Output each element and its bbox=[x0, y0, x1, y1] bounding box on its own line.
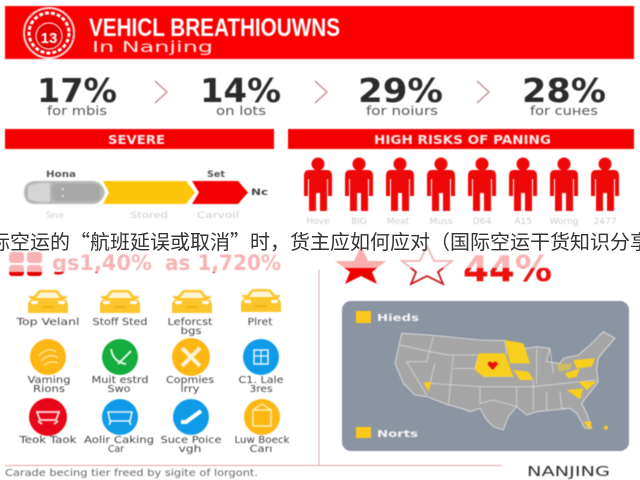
severity bar: yellow bbox=[103, 181, 195, 204]
footer note: Carade becing tier freed by sigite of lorgont. bbox=[5, 468, 258, 479]
icon: round badge with 13 bbox=[24, 8, 74, 58]
people labels: BIG bbox=[351, 217, 367, 227]
arrow 1 bbox=[155, 81, 167, 103]
row 3 labels: Aolir Caking bbox=[84, 435, 154, 446]
row 3 labels: Teok Taok bbox=[18, 435, 77, 446]
row 2 labels: Muit estrd bbox=[92, 375, 148, 386]
brand: Nanjing: NANJING bbox=[527, 465, 610, 480]
stat 29%: for noiurs bbox=[366, 103, 438, 118]
icon: yellow leaf circle bbox=[30, 339, 66, 375]
subtitle: In Nanjing bbox=[92, 38, 213, 56]
stat text: 44%: 44% bbox=[463, 249, 552, 290]
row 2 labels: Swo bbox=[108, 384, 131, 395]
legend: Norts: Norts bbox=[377, 429, 418, 440]
row: circles 1 bbox=[30, 338, 279, 376]
icon: car 3 bbox=[172, 290, 212, 313]
row 1 labels: Top Velanl bbox=[15, 317, 80, 328]
people labels: D64 bbox=[473, 217, 491, 227]
row: cars bbox=[28, 289, 281, 313]
people labels: Meat bbox=[387, 217, 410, 227]
heading: high risks: HIGH RISKS OF PANING bbox=[374, 133, 551, 147]
heading: severe bbox=[5, 129, 274, 149]
frame lines bbox=[319, 270, 502, 466]
row 3 labels: vgh bbox=[178, 444, 202, 455]
icon: grey car segment bbox=[24, 181, 105, 204]
stat 28%: for cuнes bbox=[530, 103, 598, 118]
stat 17%: for mbis bbox=[47, 103, 107, 118]
icon: car 1 bbox=[28, 290, 68, 313]
people labels: Worng bbox=[550, 217, 578, 227]
severity bar: red bbox=[192, 181, 248, 204]
legend: Norts bbox=[356, 427, 418, 440]
title: VEHICL BREATHIOUWNS bbox=[89, 14, 340, 42]
panel: map bbox=[342, 301, 629, 451]
wash over strip: left bbox=[0, 232, 319, 272]
icon: blue box circle bbox=[243, 339, 279, 375]
row 3 labels: Car bbox=[108, 444, 124, 455]
row 3 labels: Carı bbox=[250, 444, 272, 455]
row 1 labels: Plret bbox=[248, 317, 273, 328]
icon: yellow cross circle bbox=[172, 338, 210, 376]
icon: blue check circle bbox=[173, 399, 209, 435]
icon: grid of squares bbox=[9, 252, 42, 276]
people labels: Hove bbox=[306, 217, 330, 227]
stat 17%: 17% bbox=[37, 71, 117, 110]
icon: car 2 bbox=[100, 290, 140, 313]
people labels: Muss bbox=[430, 217, 453, 227]
icon: green phone circle bbox=[102, 339, 138, 375]
label: Hona: Hona bbox=[46, 170, 76, 180]
icon: round badge with 13: 13 bbox=[41, 30, 57, 47]
icon: red car circle bbox=[29, 398, 67, 436]
stats strip under panels bbox=[9, 246, 552, 290]
stat text: as 1,720%: as 1,720% bbox=[165, 251, 281, 275]
stat 14%: on lots bbox=[216, 103, 266, 118]
panel: high risks bbox=[288, 129, 634, 227]
panel: severe bbox=[5, 129, 274, 221]
people labels: A15 bbox=[514, 217, 532, 227]
highlighted states bbox=[423, 340, 608, 430]
icon: red heart marker bbox=[488, 362, 498, 370]
stat text: gs 1,40%: gs1,40% bbox=[52, 251, 152, 275]
row 2 labels: C1. Lale bbox=[238, 375, 284, 386]
icon: car 4 bbox=[241, 289, 281, 312]
legend: Hieds: Hieds bbox=[377, 313, 419, 324]
people pictogram row bbox=[304, 158, 619, 211]
arrow 3 bbox=[477, 81, 489, 103]
stat 14%: 14% bbox=[200, 71, 281, 110]
label: Seve: Seve bbox=[46, 211, 64, 221]
icon: yellow box circle bbox=[244, 399, 280, 435]
row 1 labels: bgs bbox=[180, 326, 202, 337]
row 2 labels: lrry bbox=[180, 384, 200, 395]
row 2 labels bbox=[28, 375, 284, 395]
row 1 labels: Leforcst bbox=[168, 317, 213, 328]
legend: Hieds bbox=[356, 311, 419, 324]
people labels bbox=[306, 217, 616, 227]
stat 29%: 29% bbox=[358, 71, 443, 110]
arrow 2 bbox=[315, 81, 327, 103]
row 1 labels: Stoff Sted bbox=[92, 317, 148, 328]
icon: blue car circle bbox=[102, 399, 138, 435]
header banner bbox=[5, 6, 634, 59]
row 2 labels: Vaming bbox=[28, 375, 70, 386]
row 2 labels: Copmies bbox=[166, 375, 214, 386]
stat row bbox=[37, 71, 606, 118]
heading: high risks bbox=[288, 129, 634, 149]
row 1 labels bbox=[15, 317, 273, 337]
label: Carvoil: Carvoil bbox=[197, 211, 239, 221]
row 3 labels bbox=[18, 435, 290, 455]
heading: severe: SEVERE bbox=[108, 133, 165, 147]
stat 28%: 28% bbox=[522, 71, 606, 110]
icon: hollow star bbox=[402, 246, 452, 284]
row 2 labels: 3res bbox=[250, 384, 273, 395]
chart: US map bbox=[395, 332, 615, 430]
people labels: 2477 bbox=[594, 217, 616, 227]
row 2 labels: Rions bbox=[33, 384, 65, 395]
row 3 labels: Luw Boeck bbox=[234, 435, 290, 446]
label: Stored: Stored bbox=[130, 211, 168, 221]
label: Nc: Nc bbox=[251, 188, 268, 198]
wash over strip: right bbox=[319, 232, 640, 268]
row: circles 2 bbox=[29, 398, 280, 436]
label: Set: Set bbox=[207, 170, 226, 180]
row 3 labels: Suce Poice bbox=[160, 435, 222, 446]
icon: filled star bbox=[335, 246, 386, 284]
panel: icon grid bbox=[15, 289, 290, 455]
